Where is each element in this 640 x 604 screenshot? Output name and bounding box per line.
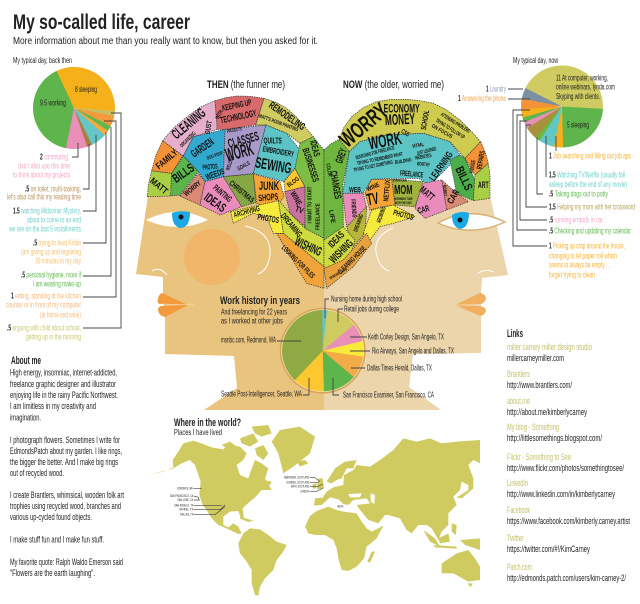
brain then: topic labels: REMODELING [266,100,307,133]
map place labels [170,476,344,517]
brain now: phrenology regions [324,99,490,288]
brain now: topic labels [324,98,489,280]
brain then: topic labels: BUSINESSES [301,147,321,183]
work history labels: msnbc.com, Redmond, WA [221,336,276,344]
pie labels back then [40,85,97,108]
about me text: I make stuff fun and I make fun stuff. [10,534,104,544]
brain now: topic labels: HTML [412,142,425,150]
about me text: out of recycled wood. [10,468,64,478]
brain then: topic labels: DUST [203,120,214,135]
links list: miller carney miller design studio [507,342,592,352]
brain now: topic labels: CSS [400,128,411,139]
brain now: topic labels: CAR [416,203,431,216]
links list: Twitter [507,533,524,543]
brain now: topic labels: WEBSITES [415,153,432,162]
brain now: topic labels: MATT [417,185,436,203]
brain then: topic labels: PHOTOS [202,162,218,172]
about me text: the bigger the better. And I make big rings [10,457,118,467]
activity labels back then: we are on the last 5 installments [8,224,81,234]
brain now: topic labels: REPAIRS [475,150,487,170]
brain now: topic labels: ARCHIVING [376,206,388,224]
activity labels back then: I am wearing make-up [33,280,81,288]
work history labels [221,294,454,400]
brain now: topic labels: PHOTOS [392,208,415,222]
pie chart: typical day back then [45,79,103,137]
brain now: topic labels: DREAMING [353,214,365,233]
activity labels now: .5 Taking dogs out to potty [549,190,608,198]
brain then: topic labels: QUILTS [263,136,282,145]
pie labels now [556,74,615,130]
brain now: topic labels: BUILDING [395,157,412,166]
brain then: topic labels: EMBROIDERY [262,144,295,159]
brain now: topic labels: DRINKING COFFEE [328,266,348,280]
brain then: topic labels: CHRISTMAS [227,179,256,205]
brain then: topic labels: BILLS [170,161,197,186]
brain then: topic labels: LOOKING FOR FILES [280,243,317,280]
brain then: topic labels: WELDING [225,155,236,171]
brain now: topic labels: WORK [367,128,403,153]
brain now: topic labels: TRYING TO FOLLOW UP [434,118,466,141]
brain now: topic labels: WISHING [327,237,356,266]
brain now: topic labels: SCHOOL [419,109,431,131]
about me text: High energy, insomniac, internet-addicted, [10,368,117,378]
leader lines now [508,89,556,246]
brain then: topic labels: GOALS [237,161,251,173]
brain now: topic labels: CHANGES [327,170,343,200]
brain now: topic labels: WITH THE KIDS [395,200,412,205]
links list: Patch.com [507,562,532,572]
brain then: topic labels: WISHING [293,234,324,259]
work history labels: Keith Corley Design, San Angelo, TX [368,332,444,342]
brain then: topic labels: WORRY [182,178,203,198]
brain then: topic labels: DREAMING [279,211,305,239]
work history labels: Dallas Times Herald, Dallas, TX [367,364,432,372]
activity labels now [458,84,635,280]
left pie heading: My typical day, back then [13,56,72,65]
about me heading: About me [11,355,41,367]
map place labels: SAN ANGELO, TX [174,503,194,507]
about me text: I photograph flowers. Sometimes I write for [10,435,120,445]
brain then: topic labels: KEEPING UP [221,97,252,113]
brain now: topic labels: TV [365,189,380,209]
activity labels back then: getting up in the morning [26,332,81,342]
work history labels: San Francisco Examiner, San Francisco, CA [343,390,434,400]
brain then: topic labels: PROJECTS [226,126,243,135]
brain then: topic labels: IDEAS [201,190,229,215]
pie chart: work history [280,308,366,394]
brain now: topic labels: LEARNING [428,150,456,183]
brain then: topic labels: CLASSES [226,129,260,151]
brain now: topic labels: IDEAS [326,229,347,250]
brain now: topic labels: MONEY [385,111,415,129]
brain then: topic labels: WEEDS [204,166,226,182]
right head now [324,190,508,410]
work history heading: And freelancing for 22 years [221,308,287,316]
activity labels back then: .5 on toilet, multi-tasking, [25,184,81,194]
brain now: topic labels: LIFE [327,209,336,224]
about me text: My favorite quote: Ralph Waldo Emerson said [10,557,123,567]
map place labels: IRVING, TX [179,508,194,512]
map place labels: DALLAS, TX [180,513,194,517]
about me text: trophies using recycled wood, branches and [10,501,121,511]
map place labels: BATH, SCOTLAND [291,484,310,488]
links list: millercarneymiller.com [507,353,564,363]
about me text: freelance graphic designer and illustrator [10,379,116,389]
about me text: I create Brantlers, whimsical, wooden folk art [10,490,124,500]
map place labels: MALTA [337,505,344,509]
brain now: topic labels: GREY [333,147,350,165]
brain now: topic labels: WORTHY [416,161,430,169]
map place labels: EDMONDS, WA [177,486,193,490]
work history heading [220,295,300,326]
pie labels now: 5 sleeping [567,120,589,130]
activity labels back then: 1 eating, standing at the kitchen [11,292,81,300]
brain then: topic labels: BLOG [286,176,301,189]
brain then: topic labels: ORGANIZING [179,131,198,149]
world map [149,425,480,597]
work history labels: Seattle Post-Intelligencer, Seattle, WA [221,390,302,398]
about me text: EdmondsPatch about my garden. I like rings, [10,446,122,456]
activity labels now: .5 running errands in car [549,216,603,224]
work history heading: Work history in years [220,295,300,307]
brain then: topic labels: SHOPS [258,191,279,203]
subtitle: More information about me than you really want to know, but then you asked for it. [13,36,318,47]
activity labels back then: (but I also use this time [18,162,70,170]
brain now: topic labels: MONEY [442,185,448,197]
brain now: topic labels: FRIENDS [349,199,358,218]
brain now: topic labels: ART [478,180,489,190]
brain now: topic labels: WORRY [334,98,393,152]
map place labels: ABERDEEN, SCOTLAND [284,476,310,480]
brain now: topic labels: JUST LEARNED [416,146,437,157]
brain then: topic labels: PHOTOS [257,212,280,225]
brain now: topic labels: HOUSE [469,160,477,174]
brain now: topic labels: SEARCHING FOR FREELANCE [355,145,395,161]
activity labels back then: .5 arguing with child about school, [7,324,81,332]
brain now: topic labels: ECONOMY [384,101,420,115]
brain then: topic labels: PAINTING [211,183,234,204]
brain then: topic labels: I WANT TO START [308,186,314,223]
brain now: topic labels: ON FOCUS [430,123,454,140]
brain now: topic labels: ATTENDING PROBLEMS [439,112,471,135]
left head then [136,190,324,410]
brain then: topic labels: CLEANING [168,105,209,142]
activity labels back then: (am giving up and regaining [21,248,81,256]
brain then: topic labels: TV [294,204,305,216]
links list: Flickr - Something to See [507,452,571,462]
brain now: topic labels: WINE [366,181,381,193]
work history labels: Retail jobs during college [344,304,399,314]
brain now: topic labels: CLEANING HOUSE [336,244,368,276]
pie labels now: Skyping with clients. [556,92,600,101]
pie labels back then: 8 sleeping [75,85,97,94]
about me text: imagination. [10,412,41,422]
map place labels: DUNDEE, SCOTLAND [287,480,310,484]
brain now: topic labels: COLOR [324,163,332,177]
work history labels: Rio Airways, San Angelo and Dallas, TX [372,346,454,356]
work history heading: as I worked at other jobs [221,316,283,326]
title: My so-called life, career [13,11,190,34]
brain then: topic labels: FAMILY [154,147,180,171]
brain then: topic labels: ARCHIVING [233,204,261,219]
work history leaders [277,299,370,395]
map place labels: LONDON [300,489,310,493]
brain then: topic labels: WITH [215,109,225,121]
pie chart: typical day now [533,78,591,135]
activity labels back then: 1.5 watching Midsomer Mystery, [13,206,81,216]
links list: https://twitter.com/#!/KimCarney [507,544,590,554]
brain now: topic labels: WEB [349,185,361,194]
then heading: THEN (the funner me) [207,79,285,91]
brain then: topic labels: IDEAS [308,139,322,158]
brain then: topic labels: DOG POOP [206,150,224,162]
activity labels back then: counter or in front of my computer [6,300,81,310]
links list: about.me [507,396,530,406]
brain then: topic labels: MATT [148,176,170,196]
map heading: Where in the world? [174,417,241,429]
activity labels now: 1 Laundry [486,84,506,94]
links list: My blog - Something [507,422,559,432]
about me text: various up-cycled found objects. [10,512,92,522]
activity labels back then [6,152,81,342]
links heading: Links [507,328,523,340]
about me text [10,368,124,578]
activity labels back then: 2 commuting [40,152,68,162]
pie labels back then: 9.5 working [40,98,66,108]
activity labels back then: about to come to an end [27,216,81,224]
links list: http://www.brantlers.com/ [507,380,572,390]
brain now: topic labels: TRYING TO GET SOMETHING [353,160,394,174]
brain then: topic labels: WINE [288,190,304,207]
activity labels now: forget trying to clean [549,270,595,280]
brain now: topic labels: CAR [445,188,462,206]
links list: LinkedIn [507,478,528,488]
activity labels back then: .5 trying to beat Kirble [33,238,81,248]
brain then: topic labels: TECHNOLOGY [219,108,258,125]
links list: Brantlers [507,369,530,379]
right pie heading: My typical day, now [513,56,558,65]
now heading: NOW (the older, worried me) [343,79,444,91]
brain now: topic labels: NETFLIX [381,179,392,202]
activity labels back then: 30 minutes in my day [35,256,81,266]
brain now: topic labels: BILLS [452,164,476,193]
brain then: topic labels: FREELANCE [315,203,321,230]
map place labels: SAN JOSE, CA [177,498,194,502]
links list: Facebook [507,505,530,515]
links list: http://about.me/kimberlycarney [507,407,587,417]
brain now: topic labels: TRYING TO REMEMBER WHAT [357,151,404,167]
activity labels back then: to think about my projects [13,170,70,180]
about me text: I am limitless in my creativity and [10,401,96,411]
brain now: topic labels: FREELANCE [400,168,424,179]
brain now: topic labels: EVERYONE [393,177,407,182]
brain now: topic labels: MOM [394,182,412,197]
links list [507,342,630,583]
activity labels back then: let's also call this my reading time [7,192,81,202]
brain then: topic labels: WORK [223,138,256,165]
activity labels back then: (at home and work) [40,310,81,320]
leader lines back then [72,113,121,328]
map heading: Places I have lived [174,427,222,437]
brain then: topic labels: MATT'S ROOM PAINTING [258,113,299,133]
brain then: topic labels: JUNK [259,179,279,193]
about me text: "Flowers are the earth laughing". [10,568,95,578]
about me text: enjoying life in the rainy Pacific Northwest. [10,390,118,400]
work history labels: Nursing home during high school [331,294,402,304]
brain then: topic labels: SEWING [254,154,293,178]
map heading [174,417,241,437]
brain then: topic labels: GARDEN [189,136,216,160]
brain then: topic labels [148,97,324,280]
activity labels now: 1 Answering the phone [458,94,506,103]
map place labels: SAN FRANCISCO, CA [170,494,194,498]
brain now: topic labels: MORNING TIME [394,196,413,201]
activity labels back then: .5 personal hygiene, more if [21,270,81,280]
brain then: phrenology regions [147,96,324,288]
